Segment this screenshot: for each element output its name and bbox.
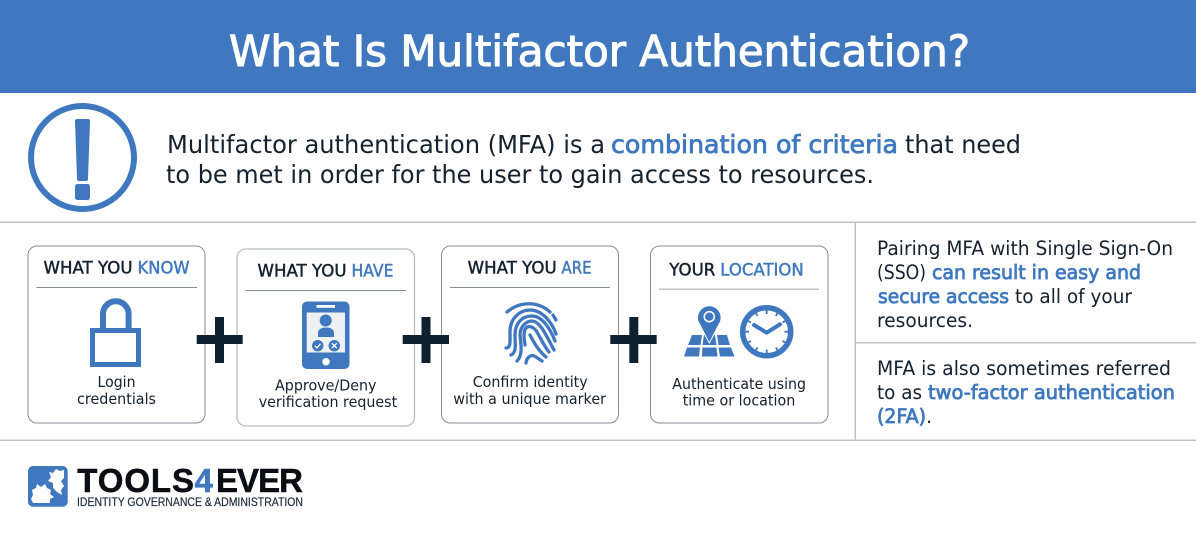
intro text: that need (905, 130, 1021, 159)
side note: single sign-on: (SSO) (877, 261, 926, 284)
icon: exclamation mark in circle (31, 106, 134, 209)
description: confirm identity: Confirm identity (473, 373, 588, 391)
panel: what you know (28, 246, 205, 423)
side note: single sign-on: to all of your (1015, 285, 1133, 308)
logo wordmark: 4 (194, 462, 214, 499)
side note: single sign-on: resources. (877, 309, 973, 332)
icon: fingerprint (506, 304, 556, 363)
panel: what you are (442, 246, 618, 423)
heading: what you know: KNOW (138, 258, 190, 278)
heading: your location: LOCATION (720, 260, 804, 280)
panel: your location (650, 246, 828, 423)
logo wordmark: EVER (216, 462, 303, 499)
logo tagline: IDENTITY GOVERNANCE & ADMINISTRATION (77, 497, 303, 509)
heading: what you know (44, 258, 190, 278)
description: time or location: Authenticate using (672, 375, 806, 393)
side note: two-factor authentication: MFA is also sometimes referred (877, 357, 1171, 380)
side note: two-factor authentication: (2FA) (877, 405, 926, 428)
heading: what you are: ARE (562, 258, 592, 278)
plus sign 1 (197, 317, 243, 363)
description: approve or deny: verification request (259, 393, 397, 411)
description: time or location: time or location (683, 392, 795, 410)
description: login credentials (77, 373, 156, 408)
description: time or location (672, 375, 806, 410)
icon: clock (743, 308, 791, 356)
intro text: combination of criteria (611, 130, 898, 159)
side note: single sign-on: can result in easy and (932, 261, 1141, 284)
heading: what you have: WHAT YOU (258, 262, 346, 280)
title: What Is Multifactor Authentication? (229, 27, 970, 77)
description: login credentials: Login (98, 373, 136, 391)
plus sign 2 (403, 317, 449, 363)
side note: single sign-on (877, 237, 1173, 332)
side note: single sign-on: Pairing MFA with Single Sign-On (877, 237, 1173, 260)
heading: your location (668, 260, 804, 280)
description: approve or deny: Approve/Deny (275, 376, 377, 394)
heading: what you are: WHAT YOU (468, 258, 557, 278)
heading: what you know: WHAT YOU (44, 258, 132, 278)
heading: what you have: HAVE (352, 262, 394, 280)
logo wordmark: TOOLS (77, 462, 194, 499)
icon: padlock (92, 301, 138, 364)
header banner (0, 0, 1196, 93)
side note: two-factor authentication: . (926, 405, 932, 428)
heading: what you have (258, 262, 394, 280)
side note: single sign-on: secure access (878, 285, 1009, 308)
section divider lines (0, 222, 1196, 441)
plus sign 3 (610, 317, 657, 363)
side note: two-factor authentication: to as (877, 381, 922, 404)
logo wordmark (77, 462, 303, 499)
description: confirm identity (453, 373, 607, 408)
description: approve or deny (259, 376, 397, 411)
icon: map pin (684, 306, 734, 356)
icon: phone with approve and deny (302, 302, 350, 369)
intro text (166, 130, 1021, 189)
description: confirm identity: with a unique marker (453, 390, 607, 408)
description: login credentials: credentials (77, 390, 156, 408)
logo: tools4ever (28, 462, 303, 509)
heading: your location: YOUR (668, 260, 715, 280)
side note: two-factor authentication (877, 357, 1175, 428)
logo mark (28, 466, 68, 507)
intro text: to be met in order for the user to gain access to resources. (166, 160, 874, 189)
intro text: Multifactor authentication (MFA) is a (167, 130, 605, 159)
side note: two-factor authentication: two-factor authentication (928, 381, 1175, 404)
panel: what you have (237, 249, 414, 426)
